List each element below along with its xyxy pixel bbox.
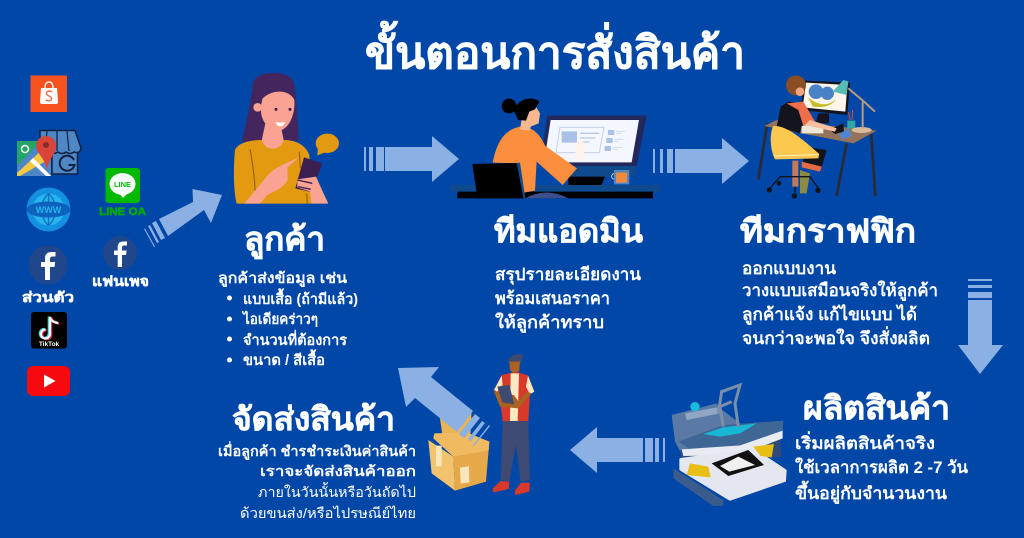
text: admin description: พร้อมเสนอราคา (495, 289, 610, 308)
illustration: admin at computer (451, 99, 660, 198)
text: production description (795, 431, 968, 505)
arrow: graphic team to production (958, 279, 1003, 374)
text: customer details (218, 270, 358, 369)
arrow: shipping to customer (398, 367, 490, 446)
heading: graphic team: ทีมกราฟฟิก (740, 213, 916, 249)
heading: customer: ลูกค้า (244, 221, 325, 260)
title: ขั้นตอนการสั่งสินค้า (365, 20, 745, 78)
heading: delivery: จัดส่งสินค้า (232, 401, 395, 437)
text: customer details: ลูกค้าส่งข้อมูล เช่น (218, 270, 347, 287)
text: customer details: แบบเสื้อ (ถ้ามีแล้ว) (243, 288, 358, 308)
text: production description: ขึ้นอยู่กับจำนวนงาน (795, 480, 947, 505)
text: production description: เริ่มผลิตสินค้าจริง (795, 431, 935, 453)
text: admin description: ให้ลูกค้าทราบ (495, 312, 604, 334)
icon: website globe: WWW (36, 205, 62, 215)
text: graphic team description: ลูกค้าแจ้ง แก้ไขแบบ ได้ (742, 304, 917, 326)
label: fan page: แฟนเพจ (92, 273, 149, 289)
text: graphic team description (742, 259, 938, 348)
panel: admin team (451, 99, 660, 334)
label: LINE OA: LINE OA (99, 206, 146, 218)
icon: Facebook fan page (103, 236, 137, 270)
text: customer details: จำนวนที่ต้องการ (243, 329, 347, 349)
illustration: customer with phone (234, 73, 339, 204)
icon: Shopee (30, 76, 67, 112)
text: delivery description: ด้วยขนส่ง/หรือไปรษณีย์ไทย (240, 505, 416, 521)
text: graphic team description: จนกว่าจะพอใจ จึงสั่งผลิต (742, 326, 930, 348)
icon: Facebook personal (28, 246, 68, 284)
text: delivery description: ภายในวันนั้นหรือวันถัดไป (258, 482, 416, 500)
text: customer details: ไอเดียคร่าวๆ (241, 310, 318, 328)
text: customer details: ขนาด / สีเสื้อ (243, 349, 325, 369)
text: delivery description: เราจะจัดส่งสินค้าออก (260, 463, 416, 479)
arrow: admin to graphic team (653, 138, 749, 184)
panel: sales channels (17, 76, 149, 396)
panel: production (672, 385, 968, 506)
illustration: boxes and delivery worker (428, 354, 534, 495)
icon: Google Maps and Business (17, 130, 81, 176)
heading: production: ผลิตสินค้า (803, 390, 950, 426)
arrow: customer to admin (364, 136, 459, 182)
text: admin description (495, 264, 641, 334)
illustration: designer at desk (758, 75, 877, 199)
arrow: channels to customer (144, 189, 222, 247)
icon: LINE: LINE (114, 180, 131, 189)
panel: graphic team (740, 75, 938, 348)
icon: TikTok (31, 312, 67, 348)
text: graphic team description: วางแบบเสมือนจริงให้ลูกค้า (742, 280, 938, 302)
text: admin description: สรุปรายละเอียดงาน (495, 264, 641, 285)
panel: customer (218, 73, 358, 369)
label: personal: ส่วนตัว (22, 289, 74, 305)
icon: TikTok: TikTok (39, 341, 60, 348)
icon: website globe (26, 188, 70, 232)
illustration: heat press machine (672, 385, 785, 506)
icon: YouTube (27, 366, 70, 396)
icon: LINE (106, 168, 140, 203)
panel: delivery (218, 354, 534, 521)
text: delivery description: เมื่อลูกค้า ชำรชำระเงินค่าสินค้า (218, 441, 416, 460)
arrow: production to shipping (570, 427, 665, 473)
text: production description: ใช้เวลาการผลิต 2 -7 วัน (795, 457, 968, 477)
text: delivery description (218, 441, 416, 521)
heading: admin team: ทีมแอดมิน (494, 213, 643, 249)
text: graphic team description: ออกแบบงาน (742, 259, 836, 278)
